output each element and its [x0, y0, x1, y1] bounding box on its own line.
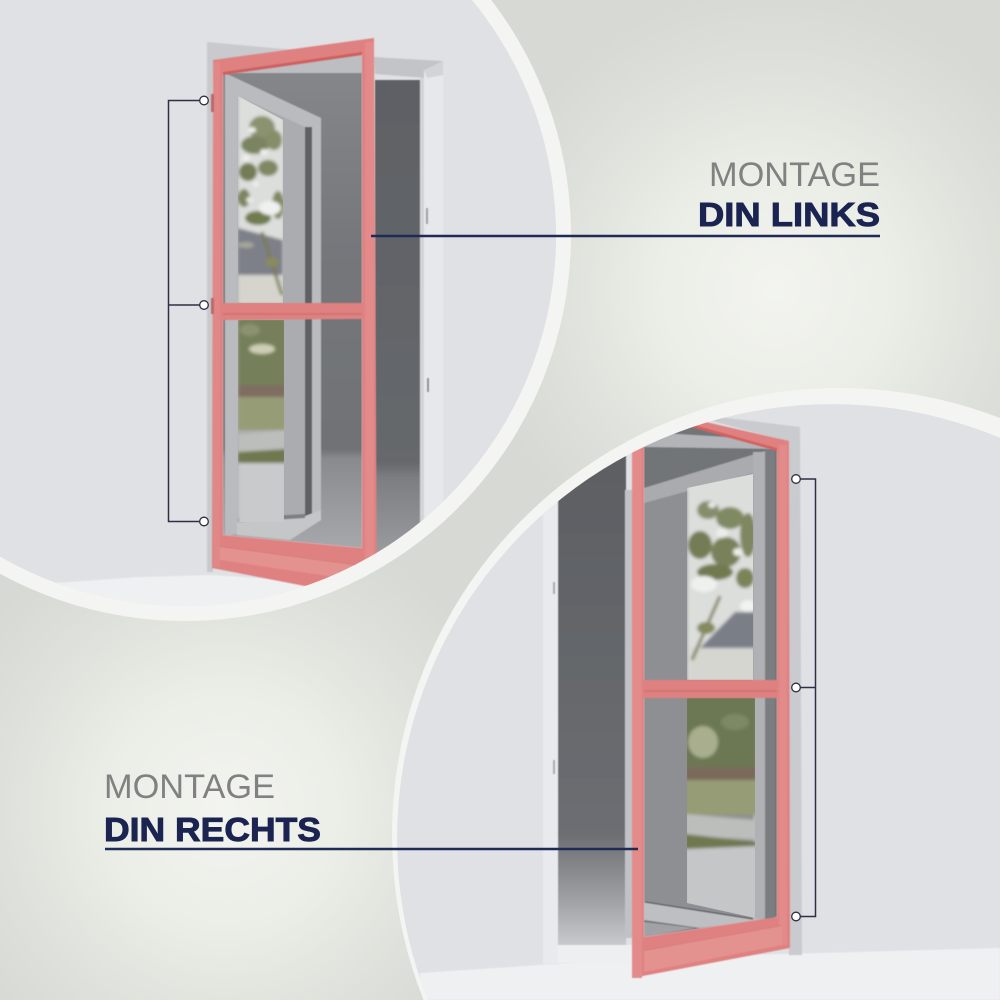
bracket: hinge positions left: [168, 96, 208, 526]
hinge marker top: [200, 96, 208, 105]
floor: [58, 575, 304, 606]
hinge marker middle: [792, 683, 800, 692]
bracket: hinge positions right: [792, 475, 816, 921]
window reflection: tree: [687, 470, 757, 682]
wall: [390, 400, 1000, 1000]
ring: bottom-right circle: [392, 388, 1000, 1000]
window reflection: tree: [238, 90, 284, 305]
heading: Montage DIN rechts: [104, 768, 321, 848]
label: montage: MONTAGE: [709, 156, 880, 194]
hinge marker top: [792, 475, 800, 483]
label: din links: DIN LINKS: [698, 196, 880, 233]
door surround: [543, 412, 802, 964]
pink screen frame: [632, 406, 790, 978]
label: din rechts: DIN RECHTS: [104, 811, 321, 848]
hinge marker bottom: [200, 517, 208, 526]
wall: [0, 0, 556, 583]
door surround: [207, 42, 443, 600]
window reflection: garden: [238, 318, 286, 525]
callout line DIN rechts: [105, 848, 638, 850]
callout line DIN links: [371, 235, 880, 237]
heading: Montage DIN links: [698, 156, 880, 233]
open window sash: [644, 470, 753, 918]
panel: door DIN links: [0, 0, 556, 587]
hinge marker middle: [200, 301, 208, 309]
label: montage: MONTAGE: [104, 768, 275, 806]
ring: top-left circle: [0, 0, 571, 621]
panel: door DIN rechts: [390, 400, 1000, 1000]
hinge marker bottom: [792, 912, 800, 921]
open window sash: [225, 73, 321, 536]
pink screen frame: [211, 38, 377, 600]
window reflection: garden: [685, 696, 757, 922]
view through screen: [644, 411, 777, 937]
floor: [420, 948, 1000, 1000]
view through screen: [223, 51, 362, 548]
